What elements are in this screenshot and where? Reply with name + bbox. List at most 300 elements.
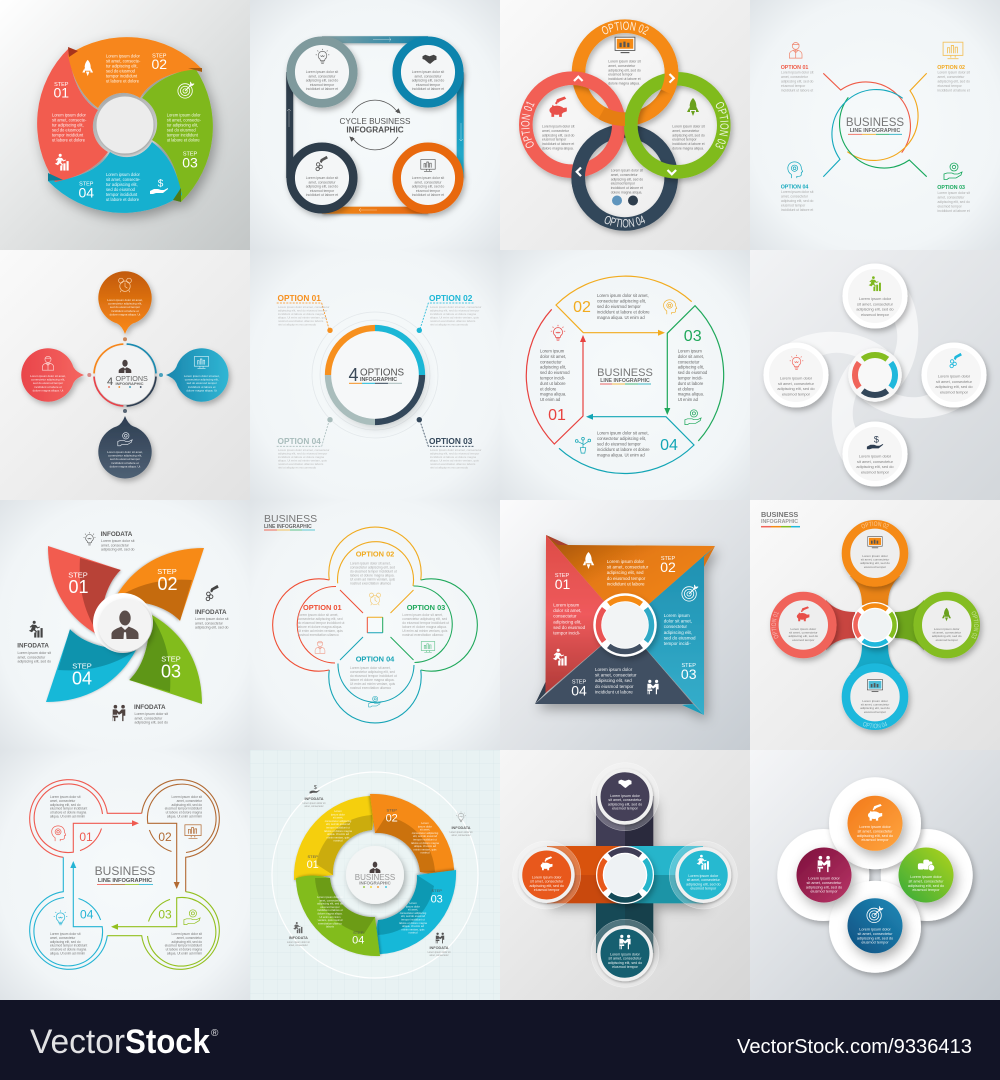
segment text: consectetur adipiscing xyxy=(325,819,352,823)
infodata right xyxy=(195,585,229,630)
option text: nostrud exercitation ullamco xyxy=(350,582,391,586)
option 04: OPTION 04 xyxy=(278,436,321,446)
infodata right: INFODATA xyxy=(195,609,227,616)
ring text: eiusmod tempor xyxy=(608,73,633,77)
step body text: sit amet, consecte- xyxy=(106,58,141,64)
circle text: adipiscing elit, sed do xyxy=(857,936,893,940)
step text: sed do eiusmod xyxy=(553,625,586,630)
text blocks: dunt ut labore xyxy=(540,381,566,386)
step text: Lorem ipsum dolor xyxy=(595,667,633,672)
ring text: Lorem ipsum dolor xyxy=(862,554,888,558)
option text: Lorem ipsum dolor sit amet, xyxy=(402,613,443,617)
segment text: tempor incididunt ut xyxy=(413,838,437,842)
step labels: 02 xyxy=(157,574,178,594)
text blocks: Lorem ipsum dolor sit xyxy=(50,932,81,936)
segment text: adipiscing elit, sed do xyxy=(317,902,343,906)
option 01: incididunt ut labore et xyxy=(781,88,813,92)
ring text: eiusmod tempor xyxy=(936,638,958,642)
option 01: adipiscing elit, sed do xyxy=(781,80,814,84)
option 03: incididunt ut labore et dolore magna xyxy=(430,455,476,459)
circle text: adipiscing elit, sed do xyxy=(856,464,894,469)
circle text: eiusmod tempor xyxy=(912,888,940,892)
option 03: Lorem ipsum dolor sit xyxy=(938,191,970,195)
step body text: Lorem ipsum dolor xyxy=(106,54,141,58)
step body text: sit amet, consecte- xyxy=(106,177,141,182)
step labels: 03 xyxy=(681,666,697,682)
step body text: ut labore et dolore xyxy=(106,78,140,84)
option 04: nostrud exercitation ullamco laboris xyxy=(278,462,324,466)
option headings: OPTION 04 xyxy=(356,654,395,664)
ring text: sit amet, consectetur xyxy=(861,558,889,562)
text blocks: eiusmod tempor incididunt xyxy=(165,944,202,948)
option 02 xyxy=(417,293,481,333)
circle text: sit amet, consectetur xyxy=(857,459,894,464)
outer lines xyxy=(30,780,219,969)
circle text: adipiscing elit, sed do xyxy=(857,834,893,838)
logo: Vector xyxy=(30,1023,125,1061)
ring text: Lorem ipsum dolor sit xyxy=(542,124,574,128)
segment text: nostrud xyxy=(409,931,418,935)
segment: step 04 xyxy=(296,876,380,956)
bubble text: sed do eiusmod tempor xyxy=(110,457,140,461)
option 02: incididunt ut labore et xyxy=(938,88,970,92)
text blocks: et dolore xyxy=(678,386,695,391)
option 03: adipiscing elit, sed do xyxy=(938,200,970,204)
center label xyxy=(107,360,148,388)
infodata bottom: adipiscing elit, sed do xyxy=(134,721,168,725)
step text: consectetur xyxy=(553,614,577,619)
overlapping arcs xyxy=(578,63,672,186)
option text: Ut enim ad minim veniam, quis xyxy=(402,629,448,633)
option 03: nisi ut aliquip ex ea commodo xyxy=(430,466,468,470)
text blocks: magna aliqua. xyxy=(540,392,566,397)
segment text: tempor incididunt ut xyxy=(326,826,350,830)
center arcs xyxy=(94,344,156,406)
segment text: Lorem xyxy=(421,821,430,825)
step labels: STEP xyxy=(661,556,676,562)
segment text: elit, sed do eiusmod xyxy=(413,834,437,838)
option text: Lorem ipsum dolor sit amet, xyxy=(298,613,338,617)
ring text: amet, consectetur xyxy=(611,173,639,177)
step text: incididunt ut labore xyxy=(595,689,633,694)
blade: step 02 xyxy=(114,548,204,621)
option 03: amet, consectetur xyxy=(938,196,965,200)
segment text: Lorem ipsum dolor sit xyxy=(317,895,343,899)
circle text: eiusmod tempor xyxy=(940,389,969,394)
option 02: amet, consectetur xyxy=(938,75,965,79)
outline: orange 02 xyxy=(556,276,692,336)
ring text: adipiscing elit, sed do xyxy=(306,185,338,189)
option text: do eiusmod tempor incididunt ut xyxy=(350,674,397,678)
step text: do eiusmod tempor xyxy=(595,684,634,689)
step labels: 01 xyxy=(307,859,319,871)
option 01: eiusmod tempor xyxy=(781,84,806,88)
bubble text: consectetur adipiscing elit, xyxy=(185,378,219,382)
option 02: nostrud exercitation ullamco laboris xyxy=(430,319,476,323)
ring text: eiusmod tempor xyxy=(611,182,636,186)
rings xyxy=(774,524,976,726)
step labels: STEP xyxy=(68,570,88,580)
segment text: aliqua. Ut enim ad xyxy=(414,844,436,848)
inner line: 04 xyxy=(34,861,103,966)
logo: Stock xyxy=(125,1023,210,1061)
center disc xyxy=(331,331,419,419)
text blocks: consectetur xyxy=(540,359,562,364)
panel: folded square xyxy=(500,500,750,750)
step labels: 04 xyxy=(571,682,587,698)
numbers: 03 xyxy=(684,328,702,345)
step labels: 03 xyxy=(182,154,198,170)
ring titles: OPTION 04 xyxy=(604,216,646,228)
infodata labels: amet, consectetur xyxy=(429,954,449,957)
step labels xyxy=(68,567,181,688)
ring text: eiusmod tempor xyxy=(416,189,441,193)
circle text: eiusmod tempor xyxy=(861,469,890,474)
panel: white circles pinwheel xyxy=(750,250,1000,500)
step labels: STEP xyxy=(431,888,442,893)
option text: do eiusmod tempor incididunt ut xyxy=(298,621,345,625)
text blocks: amet, consectetur xyxy=(50,799,76,803)
infodata labels: INFODATA xyxy=(304,797,324,801)
option 02 xyxy=(937,42,970,92)
ring: option 02 xyxy=(578,26,672,119)
segment text: exercitation ullamco xyxy=(318,921,342,925)
step body text: tempor incididunt xyxy=(106,74,138,78)
step body text: sed do eiusmod xyxy=(167,128,196,132)
text blocks: incididunt ut labore et dolore xyxy=(597,447,650,452)
step labels: 04 xyxy=(79,184,94,200)
frame strips xyxy=(286,36,464,214)
icons xyxy=(316,49,436,172)
step labels: 04 xyxy=(72,668,92,688)
title: LINE INFOGRAPHIC xyxy=(600,378,650,384)
text blocks: tempor incidi- xyxy=(678,376,703,380)
segment text: nostrud xyxy=(421,851,430,855)
ring text: amet, consectetur xyxy=(608,64,636,68)
text blocks: sed do eiusmod tempor xyxy=(597,304,641,309)
text blocks: Lorem ipsum dolor sit xyxy=(172,795,202,799)
ring text: adipiscing elit, sed do xyxy=(306,79,338,83)
text blocks: Ut enim ad xyxy=(540,397,561,402)
infodata labels: Lorem ipsum dolor sit xyxy=(303,802,326,805)
option headings: OPTION 01 xyxy=(303,603,342,612)
option 03: incididunt ut labore et xyxy=(938,209,970,213)
option 01: OPTION 01 xyxy=(278,293,321,303)
title: INFOGRAPHIC xyxy=(346,126,404,134)
option 04: adipiscing elit, sed do xyxy=(781,199,814,203)
ring text: incididunt ut labore et xyxy=(608,77,641,81)
option text: consectetur adipiscing elit, sed xyxy=(298,617,343,621)
center label: 4 xyxy=(348,365,359,385)
ring text: eiusmod tempor xyxy=(864,710,886,714)
bubble text: sed do eiusmod tempor xyxy=(187,381,217,385)
segment text: sit amet, xyxy=(333,816,343,820)
numbers: 04 xyxy=(80,908,94,922)
circle text: adipiscing elit, sed do xyxy=(935,384,973,389)
center label: INFOGRAPHIC xyxy=(116,381,144,386)
step labels xyxy=(307,808,443,946)
step labels: STEP xyxy=(161,654,181,664)
option 01: incididunt ut labore et dolore magna xyxy=(278,312,324,316)
blade: step 01 xyxy=(48,546,121,636)
title: BUSINESS xyxy=(846,117,904,129)
step body text: Lorem ipsum dolor xyxy=(167,112,201,118)
segment text: amet, consectetur xyxy=(319,898,341,902)
segment text: tempor incididunt ut xyxy=(401,918,425,922)
option 01: Lorem ipsum dolor sit amet, consectetur xyxy=(278,305,329,309)
bubble text: incididunt ut labore et xyxy=(188,385,216,389)
circle text: adipiscing elit, sed do xyxy=(806,885,842,889)
text blocks: adipiscing elit, sed do xyxy=(50,803,81,807)
node text: eiusmod tempor xyxy=(534,888,560,892)
ring text: Lorem ipsum dolor sit xyxy=(608,60,641,64)
option 02: incididunt ut labore et dolore magna xyxy=(430,312,476,316)
option 02: aliqua. Ut enim ad minim veniam, quis xyxy=(430,316,479,320)
blade: step 04 xyxy=(46,629,136,702)
step body text: tempor incididunt xyxy=(167,132,199,138)
segment text: aliqua. Ut enim ad xyxy=(402,924,424,928)
infodata bottom xyxy=(113,704,168,725)
blade: step 03 xyxy=(129,614,202,704)
text blocks: amet, consectetur xyxy=(177,936,203,940)
text blocks: Lorem ipsum dolor sit xyxy=(172,932,202,936)
option 04: incididunt ut labore et xyxy=(781,208,813,212)
text blocks: adipiscing elit, xyxy=(678,365,704,370)
ring text: amet, consectetur xyxy=(542,129,570,133)
ring titles: OPTION 04 xyxy=(863,722,888,728)
option text xyxy=(298,562,449,690)
panel: cross with circles xyxy=(500,750,750,1000)
text blocks: aliqua. Ut enim ad minim xyxy=(167,952,202,956)
option 04: incididunt ut labore et dolore magna xyxy=(278,455,324,459)
bubble text: dolore magna aliqua. Ut xyxy=(110,312,141,316)
option 04: nisi ut aliquip ex ea commodo xyxy=(278,466,316,470)
node halos xyxy=(513,763,737,987)
text blocks: ut labore et dolore magna xyxy=(50,948,87,952)
ring text: dolore magna aliqua. xyxy=(542,146,574,150)
ring text: incididunt ut labore et xyxy=(672,142,705,146)
text blocks: adipiscing elit, sed do xyxy=(50,940,81,944)
segment text: labore et dolore magna xyxy=(324,829,352,833)
node text xyxy=(530,794,721,969)
heading: LINE INFOGRAPHIC xyxy=(264,524,312,530)
ring titles: OPTION 01 xyxy=(521,102,535,148)
icons xyxy=(541,780,709,949)
connectors xyxy=(826,576,924,674)
white lobes front xyxy=(829,777,921,973)
step text: sed do eiusmod xyxy=(664,635,696,640)
step text: dolor sit amet, xyxy=(553,608,582,613)
option text: labore et dolore magna aliqua. xyxy=(350,678,395,682)
text blocks: dunt ut labore xyxy=(678,381,704,386)
segment text: labore et dolore magna xyxy=(399,921,427,925)
outline: green 03 xyxy=(664,306,724,441)
colored ring xyxy=(328,328,422,422)
center ring xyxy=(593,593,657,657)
option headings: OPTION 02 xyxy=(356,550,394,558)
option 04: amet, consectetur xyxy=(781,194,809,198)
step labels: STEP xyxy=(307,854,318,859)
logo: ® xyxy=(211,1028,219,1039)
inner line: 01 xyxy=(34,784,139,853)
option headings: OPTION 03 xyxy=(407,603,445,612)
bubble: dark xyxy=(98,416,152,478)
ring text xyxy=(542,60,705,194)
option text: consectetur adipiscing elit, sed xyxy=(350,670,395,674)
option 02: Lorem ipsum dolor sit amet, consectetur xyxy=(430,305,481,309)
ring text: adipiscing elit, sed do xyxy=(608,68,641,72)
step labels: 03 xyxy=(431,894,443,906)
colored circles xyxy=(796,796,954,953)
text blocks: eiusmod tempor incididunt xyxy=(165,807,202,811)
text blocks: adipiscing elit, xyxy=(540,365,566,370)
infodata labels: amet, consectetur xyxy=(289,944,308,947)
infodata left: INFODATA xyxy=(17,642,49,650)
segment text: veniam, quis nostrud xyxy=(318,918,343,922)
step labels xyxy=(555,556,697,698)
segment text: elit, sed do eiusmod xyxy=(401,914,425,918)
text blocks: Lorem ipsum xyxy=(678,348,702,354)
bubble text: incididunt ut labore et xyxy=(111,309,139,313)
text blocks: eiusmod tempor incididunt xyxy=(50,944,87,948)
step text: do eiusmod tempor xyxy=(607,576,646,581)
text blocks: dolor sit amet, xyxy=(678,354,704,359)
panel: metaball options xyxy=(750,500,1000,750)
node text: eiusmod tempor xyxy=(690,887,717,891)
text blocks: ut labore et dolore magna xyxy=(166,811,202,815)
option 04: Lorem ipsum dolor sit xyxy=(781,190,813,194)
ring: option 04 xyxy=(578,131,671,224)
option text: labore et dolore magna aliqua. xyxy=(298,625,342,629)
panel: 4 options bubbles xyxy=(0,250,250,500)
text blocks: Ut enim ad xyxy=(678,397,699,402)
option 02: OPTION 02 xyxy=(429,293,473,303)
option 04: Lorem ipsum dolor sit amet, consectetur xyxy=(278,448,329,452)
numbers: 03 xyxy=(158,908,172,922)
option 03: eiusmod tempor xyxy=(938,204,963,208)
ring text: Lorem ipsum dolor sit xyxy=(412,176,444,180)
circle text: eiusmod tempor xyxy=(861,838,889,842)
step body text: sed do eiusmod xyxy=(106,187,136,192)
logo xyxy=(30,1023,219,1061)
node text: Lorem ipsum dolor xyxy=(688,874,719,878)
step body text: tur adipiscing elit, xyxy=(106,182,138,187)
text blocks: adipiscing elit, sed do xyxy=(172,940,202,944)
node text: adipiscing elit, sed do xyxy=(686,882,720,886)
bubble text: dolore magna aliqua. Ut xyxy=(110,464,141,468)
outline: red 01 xyxy=(526,309,586,444)
bubble text xyxy=(30,298,220,468)
segment text: Ut enim ad minim xyxy=(320,915,341,919)
segment text: ipsum dolor xyxy=(331,812,345,816)
ring text: Lorem ipsum dolor sit xyxy=(412,70,444,74)
infodata labels: INFODATA xyxy=(429,946,449,950)
ring fills xyxy=(532,33,717,218)
step body text xyxy=(52,54,202,202)
option 01 xyxy=(277,293,333,333)
swirl segments xyxy=(37,37,213,213)
node text: Lorem ipsum dolor xyxy=(610,952,641,956)
numbers: 02 xyxy=(573,299,591,316)
step body text: sed do eiusmod xyxy=(106,68,136,74)
ring text: incididunt ut labore et xyxy=(306,87,338,91)
center disc: INFOGRAPHIC xyxy=(359,880,392,886)
infodata labels: Lorem ipsum dolor sit xyxy=(428,951,451,954)
step labels: STEP xyxy=(54,82,69,88)
text blocks: consectetur adipiscing elit, xyxy=(597,298,646,304)
segment text xyxy=(317,809,439,935)
ring text: adipiscing elit, sed do xyxy=(611,177,643,181)
option text: nostrud exercitation ullamco xyxy=(402,633,444,637)
text blocks: Lorem ipsum dolor sit amet, xyxy=(597,293,649,298)
text blocks: aliqua. Ut enim ad minim xyxy=(50,814,85,818)
option text: nostrud exercitation ullamco xyxy=(298,633,339,637)
text blocks: amet, consectetur xyxy=(50,936,76,940)
step labels xyxy=(54,54,198,200)
option 02: nisi ut aliquip ex ea commodo xyxy=(430,322,468,326)
step text: Lorem ipsum xyxy=(664,613,690,618)
cross bands xyxy=(547,796,703,953)
ring text: adipiscing elit, sed do xyxy=(542,133,575,137)
option 01: nostrud exercitation ullamco laboris xyxy=(278,319,324,323)
icons xyxy=(790,276,962,449)
segment text: aliqua. Ut enim ad xyxy=(327,832,349,836)
text blocks xyxy=(50,795,203,956)
step labels: 02 xyxy=(660,559,676,575)
bubble text: incididunt ut labore et xyxy=(34,385,62,389)
circle text: sit amet, consectetur xyxy=(857,301,894,306)
step text: dolor sit amet, xyxy=(664,619,692,624)
option text: Lorem ipsum dolor sit amet, xyxy=(350,562,391,566)
option text: do eiusmod tempor incididunt ut xyxy=(402,621,449,625)
step text: sit amet, consectetur xyxy=(595,673,637,678)
option 03 xyxy=(417,417,481,470)
circle text: eiusmod tempor xyxy=(782,391,811,396)
option 02: Lorem ipsum dolor sit xyxy=(938,70,970,74)
heading: BUSINESS xyxy=(761,510,798,519)
step body text: ut labore et dolore xyxy=(106,197,140,202)
icons xyxy=(52,825,201,925)
option 01: Lorem ipsum dolor sit xyxy=(781,70,813,74)
segment text: elit, sed do eiusmod xyxy=(326,822,350,826)
ring text: eiusmod tempor xyxy=(310,189,335,193)
icons xyxy=(549,37,699,206)
title xyxy=(846,117,904,134)
infodata top xyxy=(84,531,135,552)
node text: adipiscing elit, sed do xyxy=(530,884,564,888)
ring text: eiusmod tempor xyxy=(672,138,697,142)
step labels: STEP xyxy=(682,663,696,669)
ring text: Lorem ipsum dolor xyxy=(862,699,888,703)
option 03: nostrud exercitation ullamco laboris xyxy=(430,462,476,466)
circle text: adipiscing elit, sed do xyxy=(777,386,815,391)
option 02: eiusmod tempor xyxy=(938,84,963,88)
center hole xyxy=(96,96,154,154)
white lobes xyxy=(777,829,973,921)
option text: Ut enim ad minim veniam, quis xyxy=(350,578,395,582)
bubble text: incididunt ut labore et xyxy=(111,461,139,465)
cycle arrows xyxy=(350,100,400,150)
center wheel xyxy=(848,348,902,402)
bubble text: consectetur adipiscing elit, xyxy=(31,378,65,382)
panel: interlocked option rings xyxy=(500,0,750,250)
ring text: adipiscing elit, sed do xyxy=(412,79,444,83)
step body text: tempor incididunt xyxy=(52,132,84,138)
node text: sit amet, consectetur xyxy=(608,957,642,961)
text blocks: eiusmod tempor incididunt xyxy=(50,807,87,811)
ring text: Lorem ipsum dolor sit xyxy=(306,176,338,180)
center ring xyxy=(596,846,654,904)
